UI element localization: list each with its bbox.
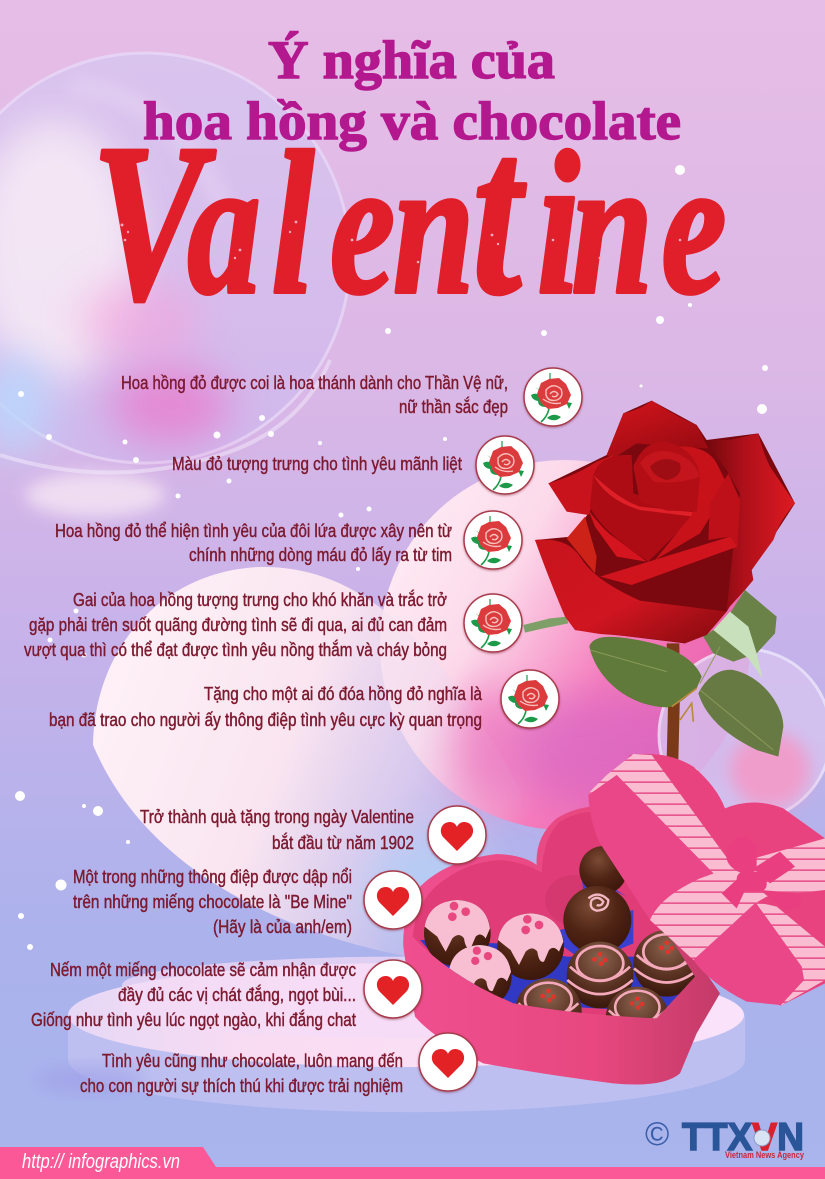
chocolates [420, 846, 695, 1018]
box silhouette [403, 807, 720, 1084]
title: Valentine script: a [188, 119, 261, 335]
leaf: left [589, 637, 702, 707]
leaf: pale [713, 612, 763, 678]
rose [523, 401, 795, 760]
text: chocolate 4 [80, 1051, 403, 1096]
icon: rose 5 [501, 670, 559, 728]
icon: rose 1 [524, 368, 582, 426]
text: roses 5: bạn đã trao cho người ấy thông điệp tình yêu cực kỳ quan trọng [49, 710, 482, 730]
icon: heart 3 [364, 960, 422, 1018]
title: Valentine script: t [473, 83, 526, 343]
lid ribbon C [755, 902, 825, 1006]
lid ribbon B [650, 838, 825, 960]
text: chocolate 3 [31, 960, 356, 1030]
leaf: lower right [698, 670, 783, 757]
text: chocolate 2 [73, 867, 352, 937]
text: roses 5: Tặng cho một ai đó đóa hồng đỏ nghĩa là [204, 684, 483, 704]
copyright mark: © [645, 1115, 669, 1152]
centre bud [633, 442, 700, 512]
footer url: http:// infographics.vn [22, 1151, 180, 1173]
text: roses 4: gặp phải trên suốt quãng đường tình sẽ đi qua, ai đủ can đảm [29, 615, 447, 635]
bubble: right pink [380, 460, 750, 830]
globe [754, 1130, 770, 1146]
text: roses 1: nữ thần sắc đẹp [399, 396, 508, 417]
lid top [617, 754, 825, 1006]
decorative dots [15, 162, 768, 950]
bubble: upper left [0, 53, 350, 517]
icon: rose 2 [476, 436, 534, 494]
title: Valentine script: i [537, 111, 580, 337]
text: roses 1 [121, 373, 508, 417]
stem [667, 643, 680, 760]
lid ribbon A [588, 754, 733, 875]
lid side wall [588, 775, 715, 920]
text: chocolate 2: (Hãy là của anh/em) [213, 917, 352, 937]
flower base [535, 401, 795, 643]
chocolate box [403, 754, 825, 1084]
title line 1: Ý nghĩa của [268, 30, 555, 90]
inner wrap [590, 455, 697, 562]
text: chocolate 3: đầy đủ các vị chát đắng, ngọt bùi... [118, 984, 356, 1005]
bubble: lower right [659, 649, 825, 821]
bow [722, 837, 802, 912]
text: chocolate 2: Một trong những thông điệp được dập nổi [73, 867, 352, 887]
icon: rose 4 [464, 594, 522, 652]
title: Valentine script: V [92, 99, 216, 348]
text: chocolate 2: trên những miếng chocolate là "Be Mine" [73, 892, 352, 912]
icon: rose 3 [464, 511, 522, 569]
text: chocolate 4: cho con người sự thích thú khi được trải nghiệm [80, 1076, 403, 1096]
icon: heart 4 [419, 1033, 477, 1091]
title: Valentine script: n [393, 119, 474, 335]
title: Valentine script [92, 83, 726, 348]
petal: left lower orange [567, 517, 597, 573]
lid side wall lower [693, 903, 804, 1005]
text: chocolate 3: Giống như tình yêu lúc ngọt ngào, khi đắng chat [31, 1009, 356, 1030]
text: chocolate 4: Tình yêu cũng như chocolate, luôn mang đến [102, 1051, 403, 1071]
agency name: Vietnam News Agency [725, 1150, 804, 1160]
box interior [413, 812, 695, 1018]
text: roses 2: Màu đỏ tượng trưng cho tình yêu mãnh liệt [172, 454, 462, 474]
petal: right [704, 433, 795, 610]
text: roses 5 [49, 684, 483, 730]
leaf: upper right [703, 590, 777, 662]
petal: back top [607, 401, 708, 458]
podium [35, 957, 745, 1112]
text: roses 4: vượt qua thì có thể đạt được tình yêu nồng thắm và cháy bỏng [24, 639, 447, 660]
bubble: centre white [93, 567, 560, 1000]
logo: TTXVN [645, 1115, 804, 1160]
text: roses 4: Gai của hoa hồng tượng trưng cho khó khăn và trắc trở [73, 589, 447, 610]
icon: heart 2 [364, 871, 422, 929]
text: roses 3: Hoa hồng đỏ thể hiện tình yêu của đôi lứa được xây nên từ [55, 521, 452, 541]
wordmark: TTXVN [682, 1116, 804, 1159]
right wrap [655, 447, 728, 560]
title: Valentine script: e [330, 119, 395, 335]
front petal [535, 540, 727, 643]
title line 2: hoa hồng và chocolate [143, 91, 681, 151]
title: Valentine script: e [662, 119, 726, 335]
icon: heart 1 [428, 806, 486, 864]
title: Valentine script: l [272, 111, 315, 337]
text: roses 3 [55, 521, 452, 565]
text: chocolate 1 [140, 807, 414, 853]
title: Ý nghĩa của hoa hồng và chocolate [143, 30, 681, 151]
fold [600, 537, 737, 585]
text: chocolate 1: Trở thành quà tặng trong ngày Valentine [140, 807, 414, 827]
text: roses 4 [24, 589, 447, 660]
text: chocolate 1: bắt đầu từ năm 1902 [272, 832, 414, 853]
footer band [0, 1147, 825, 1179]
text: roses 3: chính những dòng máu đỏ lấy ra từ tim [189, 545, 452, 565]
title: Valentine script: n [572, 119, 653, 335]
text: roses 1: Hoa hồng đỏ được coi là hoa thánh dành cho Thần Vệ nữ, [121, 373, 508, 393]
text: chocolate 3: Nếm một miếng chocolate sẽ cảm nhận được [50, 960, 356, 980]
thorns [672, 688, 697, 722]
petal: left [548, 455, 613, 515]
left sepal stalk [523, 617, 568, 633]
